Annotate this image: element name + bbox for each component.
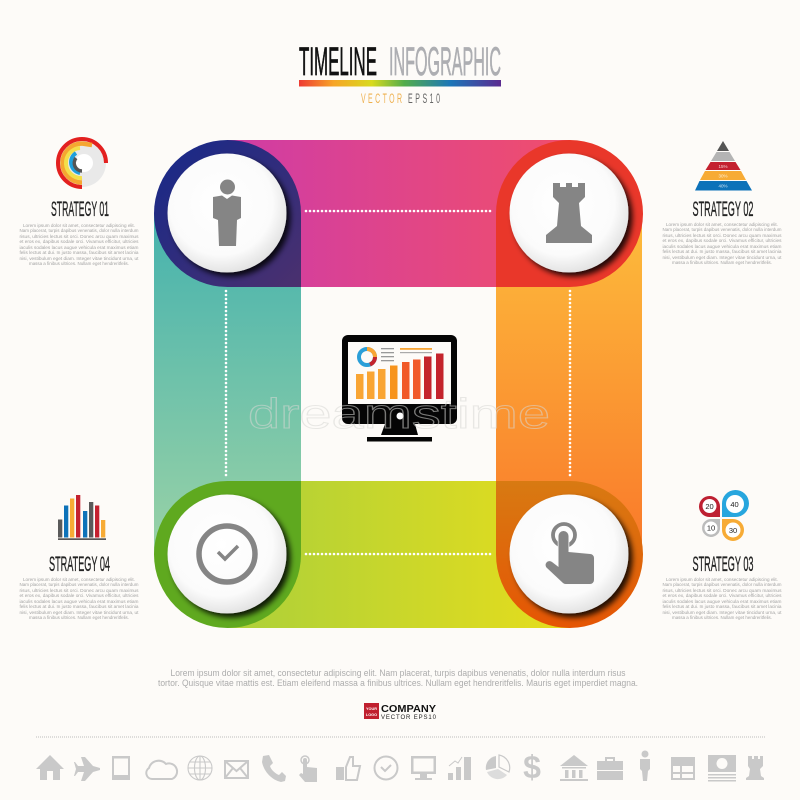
icon: four teardrop numbers: 40 [730,500,739,509]
dotted connector: top [306,210,492,212]
text block: nisi, vestibulum eget diam. Integer vitae tincidunt urna, ut [662,255,782,260]
icon: four teardrop numbers [699,490,749,541]
icon: person [640,750,650,781]
text block: massa a finibus ultrices. Nullam eget hendreritfelis. [672,615,772,620]
text block: felis lectus at dui. In justo massa, faucibus sit amet lacinia [20,250,139,255]
panel: rounded square timeline [154,140,643,628]
button: chess rook [510,154,628,272]
button: clock [168,494,286,614]
icon: monitor [411,756,436,780]
company logo: LOGO [366,713,377,717]
title: VECTOR [361,92,402,107]
text block: Nam placerat, turpis dapibus venenatis, dolor nulla interdum [20,228,139,233]
text block: massa a finibus ultrices. Nullam eget hendreritfelis. [29,615,129,620]
icon: rainbow donut [58,139,106,187]
watermark: dreamstime [248,390,550,437]
company logo: VECTOR EPS10 [381,715,437,721]
button: touch hand [510,494,628,614]
corner: top left navy [154,140,301,287]
title: TIMELINE [299,40,377,84]
panel: strategy 01 [20,139,139,266]
title: EPS10 [408,92,440,107]
text block: nisi, vestibulum eget diam. Integer vitae tincidunt urna, ut [20,610,139,615]
icon: bank [560,755,588,781]
panel: strategy 04 [20,495,139,620]
icon: pyramid: 40% [718,184,728,188]
dotted divider [36,736,765,738]
footer paragraph [158,668,638,688]
infographic canvas: INFOGRAPHIC [389,40,501,84]
icon: four teardrop numbers: 30 [729,526,737,535]
panel: strategy 02 [662,141,782,265]
text block: et eros ex, dapibus sodale orci. Vivamus efficitur, ultricies [662,593,782,598]
icon: globe [188,756,212,780]
text block [662,577,782,620]
band: top magenta [227,140,569,287]
icon: pyramid [695,141,752,190]
text block: risus, ultricies lectus sit orci. Donec arcu quam maximus [662,588,782,593]
icon: envelope [225,761,248,778]
footer paragraph: tortor. Quisque vitae mattis est. Etiam eleifend massa a finibus ultrices. Nullam eget hendreritfelis. Mauris eget imperdiet magna. [158,678,638,688]
company logo: YOUR [366,707,377,711]
icon: pie chart [486,755,510,779]
text block: felis lectus at dui. In justo massa, faucibus sit amet lacinia [662,249,782,254]
band: right orange [496,213,642,555]
text block: nisi, vestibulum eget diam. Integer vitae tincidunt urna, ut [20,256,139,261]
text block: felis lectus at dui. In justo massa, faucibus sit amet lacinia [20,604,139,609]
corner: top right red [496,140,643,287]
icon: four teardrop numbers: 20 [705,502,714,511]
icon: tablet [112,756,130,780]
panel: strategy 03 [662,490,782,620]
text block: Lorem ipsum dolor sit amet, consectetur adipiscing elit. [23,577,135,582]
icon: computer monitor with charts [342,335,457,442]
icon: money [708,755,736,782]
icon: dollar: $ [523,749,541,785]
icon: pyramid: 30% [718,174,728,178]
icon: plane [74,757,100,781]
corner: bottom right orange [496,481,643,628]
button: person [168,154,286,272]
icon: clock [374,756,398,780]
text block: iaculis sodales lacus augue vehicula erat maximus etiam [662,599,782,604]
dotted connector: bottom [306,553,492,555]
icon: four teardrop numbers: 10 [707,524,715,532]
icon: touch [299,756,317,782]
icon: cloud [146,761,177,779]
text block: iaculis sodales lacus augue vehicula erat maximus etiam [20,245,139,250]
text block: Nam placerat, turpis dapibus venenatis, dolor nulla interdum [662,227,782,232]
dotted connector: left [225,291,227,476]
icon: calculator [671,757,695,780]
text block: felis lectus at dui. In justo massa, faucibus sit amet lacinia [662,604,782,609]
text block: risus, ultricies lectus sit orci. Donec arcu quam maximus [20,234,139,239]
text block [662,222,782,265]
company logo: COMPANY [381,703,436,715]
corner: bottom left green [154,481,301,628]
company logo [364,703,437,721]
text block: et eros ex, dapibus sodale orci. Vivamus efficitur, ultricies [20,239,139,244]
text block: iaculis sodales lacus augue vehicula erat maximus etiam [662,244,782,249]
text block: et eros ex, dapibus sodale orci. Vivamus efficitur, ultricies [662,238,782,243]
icon: briefcase [597,757,623,780]
text block: iaculis sodales lacus augue vehicula erat maximus etiam [20,599,139,604]
text block: risus, ultricies lectus sit orci. Donec arcu quam maximus [662,233,782,238]
panel: strategy 01: STRATEGY 01 [51,198,109,221]
icon: home [36,755,64,780]
band: bottom lime [227,481,569,628]
text block: risus, ultricies lectus sit orci. Donec arcu quam maximus [20,588,139,593]
title [299,40,501,107]
icon: bar chart [58,495,106,540]
footer paragraph: Lorem ipsum dolor sit amet, consectetur adipiscing elit. Nam placerat, turpis dapibus venenatis, dolor nulla interdum risus [170,668,626,678]
text block: et eros ex, dapibus sodale orci. Vivamus efficitur, ultricies [20,593,139,598]
text block [20,223,139,266]
icon: rook [746,756,764,780]
text block: Lorem ipsum dolor sit amet, consectetur adipiscing elit. [23,223,135,228]
text block: massa a finibus ultrices. Nullam eget hendreritfelis. [29,261,129,266]
text block: nisi, vestibulum eget diam. Integer vitae tincidunt urna, ut [662,610,782,615]
text block: massa a finibus ultrices. Nullam eget hendreritfelis. [672,260,772,265]
text block: Nam placerat, turpis dapibus venenatis, dolor nulla interdum [662,582,782,587]
dotted connector: right [569,291,571,476]
text block: Lorem ipsum dolor sit amet, consectetur adipiscing elit. [666,577,778,582]
icon: bar growth [448,757,471,780]
text block: Nam placerat, turpis dapibus venenatis, dolor nulla interdum [20,582,139,587]
icon: pyramid: 15% [718,164,728,169]
text block: Lorem ipsum dolor sit amet, consectetur adipiscing elit. [666,222,778,227]
panel: strategy 04: STRATEGY 04 [49,553,110,576]
icon: thumbs up [336,757,360,780]
band: left teal [154,213,301,555]
text block [20,577,139,620]
icon row [36,749,764,785]
icon: telephone [262,755,286,782]
